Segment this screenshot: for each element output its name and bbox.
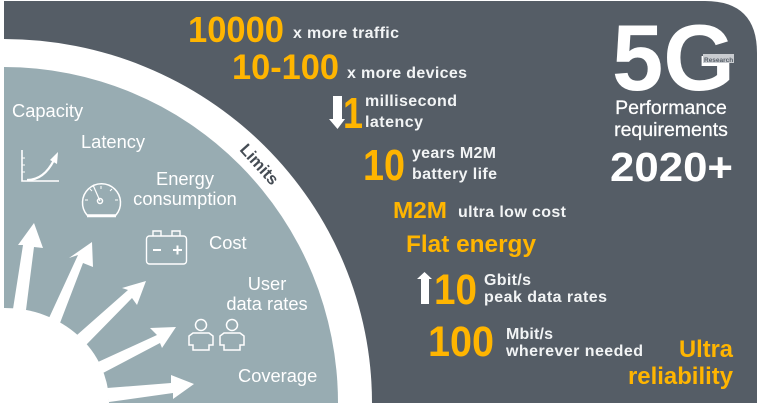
white hub (4, 308, 109, 403)
logo tag: Research: Research (704, 57, 733, 64)
stat: 1 millisecond latency: latency (365, 114, 423, 131)
stat: 10 Gbit/s peak data rates: 10 (434, 266, 477, 314)
stat: M2M ultra low cost: ultra low cost (458, 204, 567, 221)
stat: 10 Gbit/s peak data rates (417, 266, 607, 314)
stat: 1 millisecond latency (329, 89, 457, 138)
label: Coverage: Coverage (238, 365, 317, 386)
stat: M2M ultra low cost (393, 197, 567, 223)
title: 5G: 5G (612, 5, 735, 110)
label: User data rates: data rates (226, 293, 308, 314)
panel: limits white ring (4, 39, 372, 403)
year: 2020+: 2020+ (610, 144, 733, 190)
stat: 10 years M2M battery life (363, 141, 497, 190)
label: Energy consumption: Energy (156, 168, 214, 189)
stat: 100 Mbit/s wherever needed: Mbit/s (506, 326, 553, 343)
stat: 1 millisecond latency: millisecond (365, 93, 457, 110)
ring label: Limits: Limits (236, 141, 282, 189)
stat: Ultra reliability: Ultra (679, 336, 734, 363)
icon: battery (146, 231, 186, 264)
stat: 100 Mbit/s wherever needed: 100 (428, 318, 494, 366)
stat: 10-100 x more devices: 10-100 (232, 48, 339, 87)
label: User data rates: User (248, 273, 286, 294)
stat: Ultra reliability: reliability (628, 363, 734, 390)
stat: 100 Mbit/s wherever needed: wherever needed (505, 343, 643, 360)
stat: 10000 x more traffic: 10000 (188, 9, 284, 50)
stat: 10000 x more traffic (188, 9, 399, 50)
label: Energy consumption: consumption (133, 188, 237, 209)
icon: users (189, 320, 244, 350)
stat: 1 millisecond latency: 1 (343, 89, 363, 138)
stat: M2M ultra low cost: M2M (393, 197, 447, 223)
stat: 10 years M2M battery life: 10 (363, 141, 405, 190)
panel: light quarter circle (4, 67, 338, 403)
stat: 10 Gbit/s peak data rates: Gbit/s (484, 272, 531, 289)
stat: 10 Gbit/s peak data rates: peak data rates (484, 289, 607, 306)
stat: 10-100 x more devices (232, 48, 467, 87)
label: Cost: Cost (209, 232, 247, 253)
icon: capacity growth chart (22, 150, 59, 181)
label: Capacity: Capacity (12, 100, 84, 121)
logo tag: Research (703, 54, 734, 64)
arrows: five white radial arrows (13, 223, 194, 402)
subtitle: Performance requirements: requirements (614, 119, 728, 141)
icon: latency gauge (83, 184, 120, 216)
stat: 10 years M2M battery life: battery life (412, 166, 497, 183)
stat: Ultra reliability (628, 336, 734, 390)
stat: Flat energy: Flat energy (406, 231, 537, 258)
stat: 100 Mbit/s wherever needed (428, 318, 643, 366)
label: Latency: Latency (81, 131, 146, 152)
stat: 10 years M2M battery life: years M2M (412, 145, 496, 162)
stat: 10000 x more traffic: x more traffic (293, 25, 399, 42)
stat: 10-100 x more devices: x more devices (347, 65, 467, 82)
subtitle: Performance requirements: Performance (615, 97, 727, 119)
